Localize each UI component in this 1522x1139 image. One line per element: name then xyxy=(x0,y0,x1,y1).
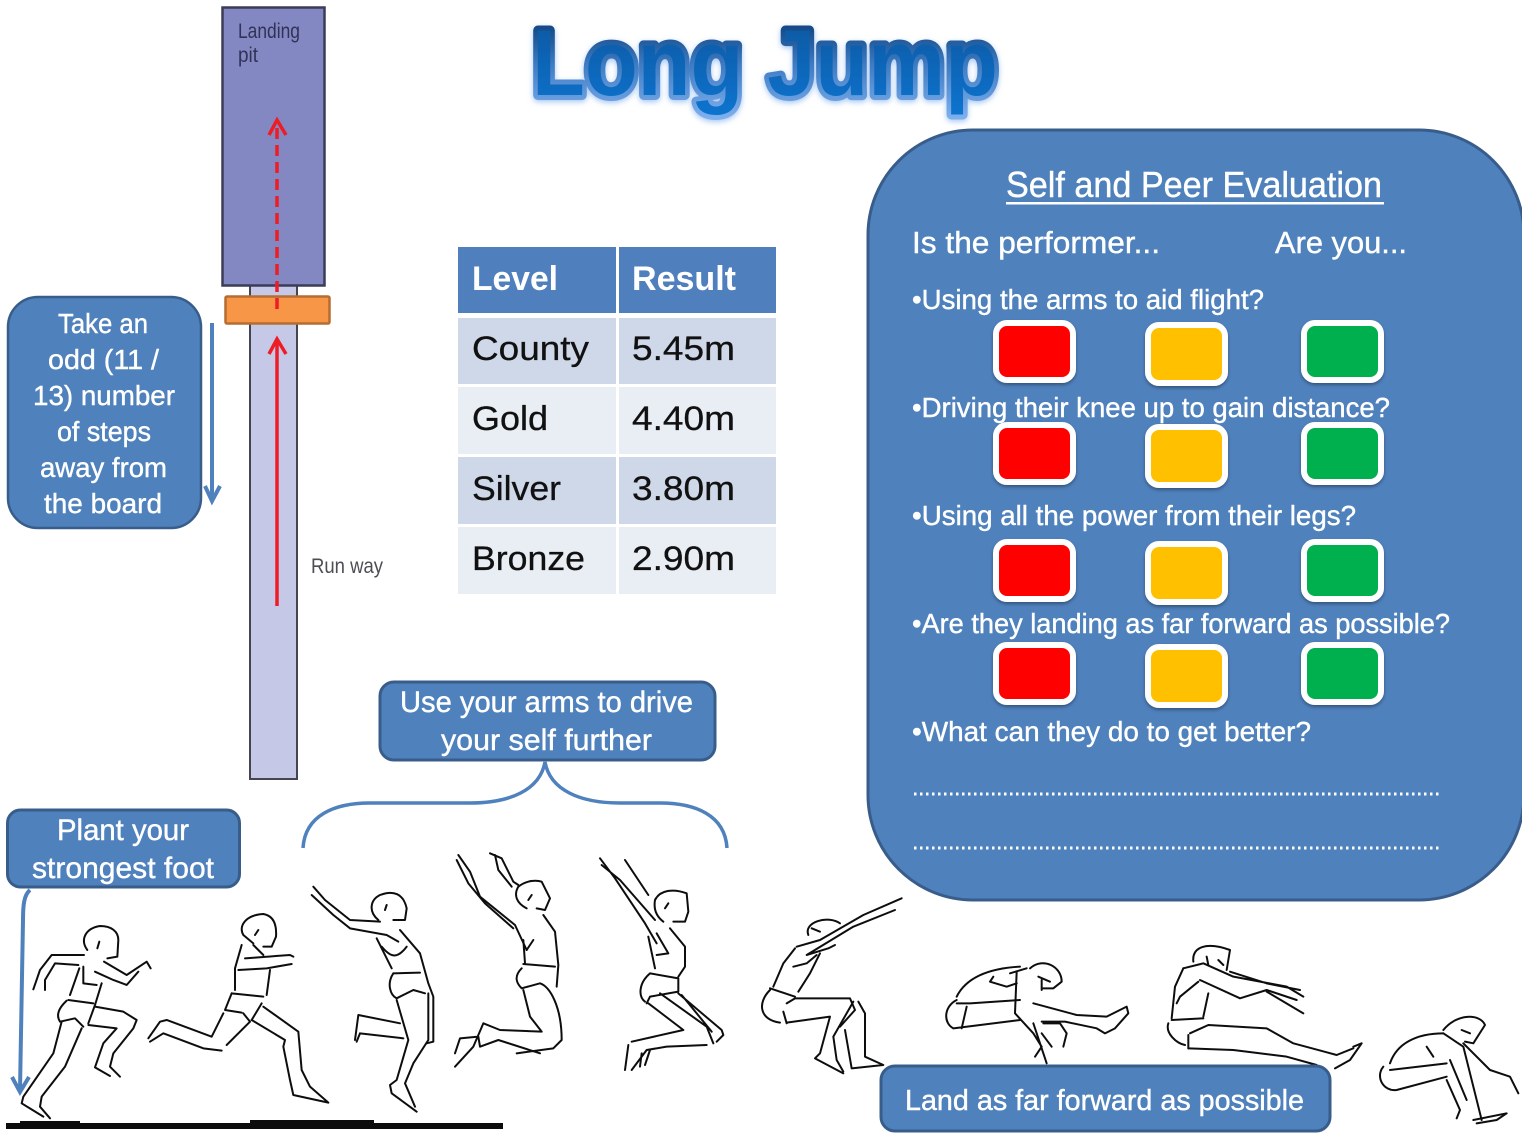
row: bronze xyxy=(458,527,776,594)
title: Long Jump xyxy=(532,10,998,115)
figure 3: take off xyxy=(312,887,433,1112)
figure 5: flight knees up xyxy=(600,858,723,1070)
arrow: dashed flight path xyxy=(269,120,286,309)
callout: steps xyxy=(8,297,201,528)
row: bronze: Bronze xyxy=(472,540,585,578)
row: silver xyxy=(458,457,776,524)
answer line 2 xyxy=(914,846,1442,850)
figures: jump sequence xyxy=(22,853,1518,1123)
callout: arms xyxy=(380,682,715,760)
callout: plant foot: strongest foot xyxy=(32,852,215,885)
callout: steps: 13) number xyxy=(33,380,175,411)
question 4: •Are they landing as far forward as possible? xyxy=(912,608,1450,639)
answer line 1 xyxy=(914,792,1442,796)
callout: steps: Take an xyxy=(58,308,148,339)
callout: landing: Land as far forward as possible xyxy=(905,1085,1304,1117)
landing pit xyxy=(222,8,324,286)
row: bronze: 2.90m xyxy=(632,540,735,578)
arrow: steps distance xyxy=(205,323,220,501)
table header: Result xyxy=(632,260,736,298)
callout: landing xyxy=(881,1066,1330,1131)
callout: arms: Use your arms to drive xyxy=(400,686,693,719)
row: gold: 4.40m xyxy=(632,400,735,438)
callout: steps: away from xyxy=(40,452,167,483)
figure 7: tucked reach xyxy=(946,963,1128,1063)
ground line xyxy=(6,1120,503,1129)
traffic lights 3 xyxy=(996,542,1381,602)
arrow: run-up xyxy=(269,339,286,606)
table header: Level xyxy=(472,260,558,298)
figure 4: flight arms up xyxy=(455,853,562,1067)
row: silver: 3.80m xyxy=(632,470,735,508)
arrow: plant foot xyxy=(12,890,30,1092)
callout: plant foot xyxy=(8,810,240,887)
figure 1: approach xyxy=(22,926,151,1118)
question 5: •What can they do to get better? xyxy=(912,716,1311,747)
column prompts xyxy=(912,225,1407,260)
figure 2: stride xyxy=(148,914,328,1103)
row: gold: Gold xyxy=(472,400,548,438)
take-off board xyxy=(226,296,330,324)
callout: steps: odd (11 / xyxy=(48,344,159,375)
results table xyxy=(458,247,776,594)
figure 8: legs extended xyxy=(1168,946,1362,1068)
row: county xyxy=(458,318,776,384)
callout: steps: of steps xyxy=(57,416,151,447)
table header xyxy=(458,247,776,313)
column prompts: Is the performer... xyxy=(912,225,1160,260)
landing pit label: pit xyxy=(238,44,258,67)
row: county: 5.45m xyxy=(632,330,735,368)
landing pit label: Landing xyxy=(238,20,300,43)
question 3: •Using all the power from their legs? xyxy=(912,500,1356,531)
callout: arms: your self further xyxy=(441,724,652,757)
panel heading: Self and Peer Evaluation xyxy=(1006,164,1382,205)
runway label: Run way xyxy=(311,555,383,578)
panel: self and peer evaluation xyxy=(868,130,1522,900)
callout: steps: the board xyxy=(44,488,162,519)
figure 9: landing xyxy=(1380,1017,1518,1123)
traffic lights 4 xyxy=(996,645,1381,705)
bracket: arm phases xyxy=(303,762,727,848)
callout: plant foot: Plant your xyxy=(57,814,189,847)
runway xyxy=(250,280,297,779)
question 1: •Using the arms to aid flight? xyxy=(912,284,1264,315)
landing pit label xyxy=(238,20,300,67)
question 2: •Driving their knee up to gain distance? xyxy=(912,392,1390,423)
traffic lights 1 xyxy=(996,323,1381,383)
column prompts: Are you... xyxy=(1275,225,1407,260)
row: silver: Silver xyxy=(472,470,561,508)
row: county: County xyxy=(472,330,589,368)
traffic lights 2 xyxy=(996,425,1381,485)
row: gold xyxy=(458,387,776,454)
figure 6: reach forward xyxy=(762,898,902,1073)
diagram: runway and landing pit xyxy=(222,8,383,779)
